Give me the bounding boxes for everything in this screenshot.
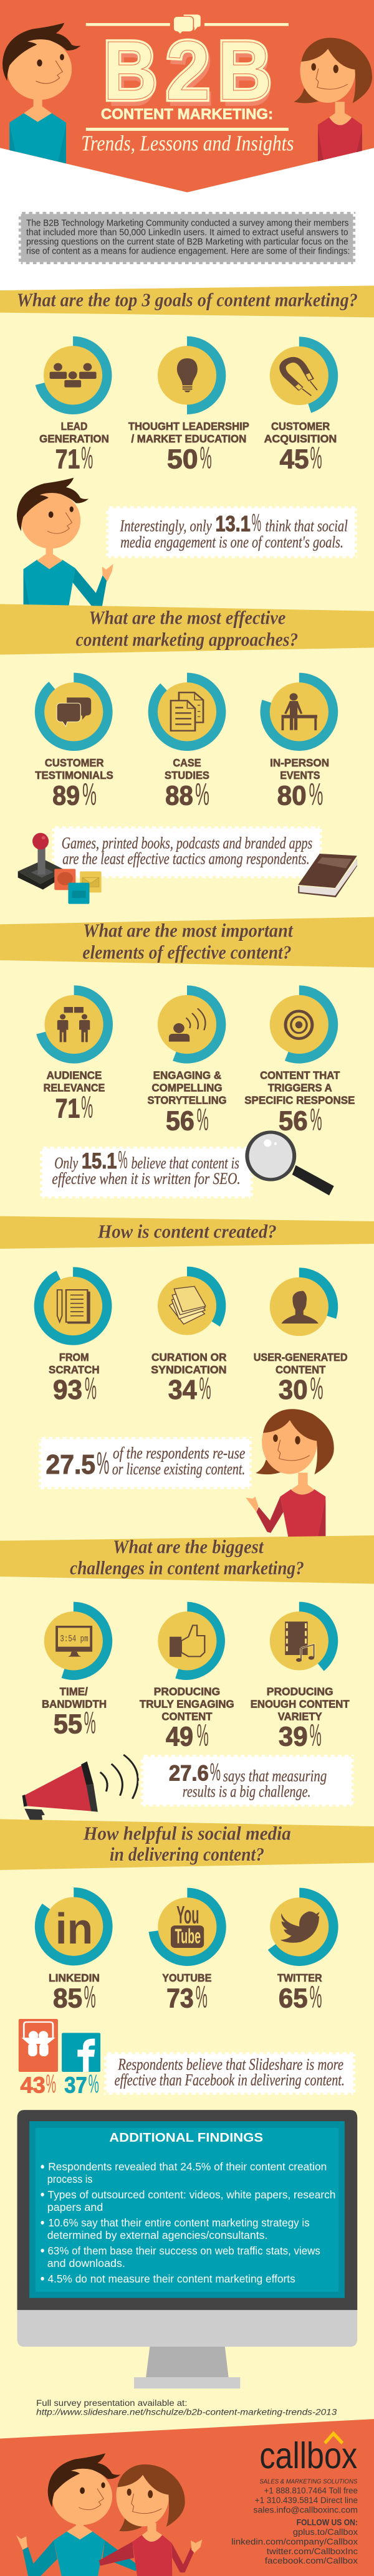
label: specific response: TRIGGERS A — [268, 1082, 332, 1094]
label: engaging storytelling — [147, 1069, 227, 1137]
panel: social media: % — [310, 1980, 322, 2015]
contact details: SALES & MARKETING SOLUTIONS — [259, 2478, 358, 2485]
donut: in-person events 80% — [260, 673, 338, 751]
label: customer acquisition: % — [310, 441, 322, 475]
contact details: twitter.com/CallboxInc — [267, 2546, 358, 2556]
section heading — [0, 1819, 374, 1870]
label: from scratch — [49, 1351, 100, 1406]
icon: youtube: Tube — [175, 1925, 201, 1948]
callout: social media engagement: Interestingly, only — [120, 517, 212, 535]
icon: linkedin: in — [55, 1904, 93, 1953]
section heading: in delivering content? — [110, 1844, 264, 1865]
icon: light bulb — [177, 358, 198, 392]
label: engaging content: TRULY ENGAGING — [140, 1698, 234, 1710]
label: customer testimonials — [35, 756, 113, 812]
label: lead generation: GENERATION — [39, 432, 109, 445]
callout: SEO: effective when it is written for SEO. — [52, 1170, 241, 1188]
section heading: challenges in content marketing? — [70, 1558, 304, 1579]
label: user generated: 30 — [279, 1374, 308, 1405]
contact details: +1 310.439.5814 Direct line — [255, 2495, 358, 2505]
panel: how is content created: % — [85, 1371, 97, 1406]
callout: SEO: believe that content is — [131, 1154, 239, 1172]
callout: re-use: or license existing content. — [112, 1460, 245, 1478]
label: thought leadership: THOUGHT LEADERSHIP — [128, 420, 249, 432]
label: engaging storytelling: STORYTELLING — [147, 1094, 227, 1106]
label: lead generation: 71 — [55, 444, 80, 474]
panel: social media: % — [84, 1980, 96, 2015]
label: audience relevance: AUDIENCE — [47, 1069, 102, 1081]
icon: megaphone — [22, 1755, 138, 1820]
donut: engaging content 49% — [158, 1602, 225, 1680]
panel: additional findings monitor — [0, 2110, 374, 2576]
stat: slideshare 43%: 43 — [21, 2073, 46, 2098]
label: content variety — [251, 1686, 350, 1753]
donut: from scratch 93% — [34, 1267, 112, 1345]
label: youtube: 73 — [166, 1983, 194, 2013]
label: specific response: 56 — [279, 1105, 308, 1136]
label: time bandwidth: TIME/ — [60, 1686, 88, 1697]
woman character pointing — [246, 1409, 334, 1539]
findings list: determined by external agencies/consultants. — [47, 2229, 267, 2241]
section heading — [0, 604, 374, 655]
label: from scratch: FROM — [59, 1351, 89, 1363]
section heading: elements of effective content? — [82, 942, 292, 963]
label: time bandwidth — [42, 1686, 107, 1740]
label: engaging content: % — [197, 1718, 209, 1753]
label: twitter — [277, 1972, 322, 2015]
icon: facebook — [62, 2033, 100, 2072]
label: lead generation — [39, 420, 109, 475]
panel: social media: % — [46, 2069, 56, 2099]
title: B2B: 2 — [166, 24, 210, 117]
label: in-person events: % — [309, 777, 323, 812]
man character pointing — [17, 478, 113, 611]
findings list: Types of outsourced content: videos, white papers, research — [48, 2188, 335, 2201]
survey source text: Full survey presentation available at: — [36, 2398, 187, 2408]
label: case studies: STUDIES — [165, 769, 209, 781]
findings list: and downloads. — [47, 2257, 125, 2269]
label: audience relevance: % — [81, 1090, 93, 1124]
panel: how is content created — [0, 1216, 374, 1539]
label: in-person events: 80 — [277, 780, 307, 811]
label: case studies — [165, 756, 209, 812]
label: from scratch: 93 — [53, 1374, 82, 1405]
woman character in footer — [99, 2464, 202, 2576]
icon: book — [298, 854, 357, 897]
icon: pencil and notebook — [57, 1290, 90, 1324]
title: B2B: 2 — [170, 27, 212, 122]
man character — [2, 23, 80, 163]
panel: header — [0, 0, 374, 264]
icon: two people talking — [57, 1007, 90, 1042]
callout: slideshare vs facebook — [104, 2052, 355, 2095]
icon: storyteller — [169, 1008, 205, 1042]
section heading — [0, 917, 374, 968]
label: in-person events — [270, 756, 329, 812]
label: engaging storytelling: ENGAGING & — [153, 1069, 221, 1081]
label: customer testimonials: 89 — [52, 780, 80, 811]
section heading — [0, 285, 374, 317]
callout: social media engagement: 13.1 — [216, 512, 251, 536]
panel: biggest challenges — [0, 1535, 374, 1820]
icon: user silhouette — [282, 1291, 319, 1324]
label: in-person events: EVENTS — [280, 769, 320, 781]
callout: least effective tactics — [52, 826, 322, 878]
survey source text: http://www.slideshare.net/hschulze/b2b-content-marketing-trends-2013 — [36, 2407, 337, 2417]
icon: target — [285, 1011, 312, 1039]
icon: slideshare — [19, 2019, 58, 2072]
donut: thought leadership 50% — [158, 336, 226, 414]
label: linkedin: LINKEDIN — [49, 1972, 100, 1984]
section heading: How is content created? — [97, 1222, 277, 1243]
donut: user generated 30% — [270, 1267, 338, 1336]
icon: monitor clock: 3:54 pm — [60, 1634, 89, 1644]
icon: magnet — [282, 360, 317, 396]
callout: measuring results: says that measuring — [223, 1767, 327, 1785]
contact details: sales.info@callboxinc.com — [253, 2505, 358, 2515]
section heading: How helpful is social media — [83, 1824, 291, 1844]
label: engaging content: PRODUCING — [154, 1686, 220, 1697]
callout: re-use: of the respondents re-use — [113, 1444, 246, 1462]
header banner — [0, 0, 374, 193]
label: youtube — [162, 1972, 211, 2015]
icon: thumbs up — [170, 1625, 204, 1657]
callout: SEO: Only — [54, 1154, 78, 1172]
section heading — [0, 1216, 374, 1249]
label: content variety: % — [310, 1718, 322, 1753]
label: customer testimonials: % — [82, 777, 97, 812]
label: linkedin — [49, 1972, 100, 2015]
donut: twitter 65% — [268, 1888, 338, 1966]
label: curation or syndication: % — [199, 1371, 211, 1406]
label: time bandwidth: BANDWIDTH — [42, 1698, 107, 1710]
donut: specific response 56% — [270, 985, 338, 1064]
label: engaging content — [140, 1686, 234, 1753]
label: curation or syndication — [151, 1351, 227, 1406]
icon: person at table — [282, 693, 317, 730]
callout: measuring results — [141, 1755, 353, 1806]
stat: slideshare 43% — [21, 2069, 56, 2099]
panel: effective approaches — [0, 604, 374, 904]
label: content variety: PRODUCING — [267, 1686, 333, 1697]
label: customer testimonials: CUSTOMER — [45, 756, 104, 769]
title: B2B: B — [218, 24, 272, 117]
callout: SEO: 15.1 — [82, 1148, 117, 1173]
icon: twitter bird — [280, 1911, 320, 1943]
label: specific response: CONTENT THAT — [260, 1069, 340, 1081]
label: lead generation: LEAD — [61, 420, 87, 432]
label: twitter: 65 — [279, 1983, 308, 2013]
section heading: What are the most important — [83, 920, 294, 942]
callout: social media engagement: % — [252, 509, 261, 537]
icon: people — [50, 363, 97, 388]
label: user generated: USER-GENERATED — [254, 1351, 348, 1363]
label: engaging content: CONTENT — [161, 1710, 213, 1722]
section heading: What are the biggest — [113, 1537, 264, 1558]
monitor illustration — [17, 2110, 357, 2388]
icon: stack of papers — [170, 1286, 206, 1324]
icon: speech bubbles and rules — [86, 14, 289, 131]
label: engaging storytelling: % — [197, 1102, 209, 1137]
label: time bandwidth: 55 — [54, 1709, 82, 1739]
donut: engaging storytelling 56% — [158, 985, 226, 1064]
callout: measuring results: 27.6 — [169, 1761, 209, 1785]
contact details: gplus.to/Callbox — [293, 2527, 358, 2537]
label: engaging storytelling: COMPELLING — [151, 1082, 223, 1094]
icon: app tiles — [54, 869, 102, 904]
label: thought leadership: / MARKET EDUCATION — [131, 432, 246, 445]
donut: time 55% — [44, 1602, 112, 1680]
callout: re-use: % — [97, 1446, 109, 1481]
donut: lead generation 71% — [36, 336, 112, 414]
label: twitter: TWITTER — [277, 1972, 322, 1984]
label: case studies: CASE — [173, 756, 201, 769]
panel: social media — [0, 1819, 374, 2099]
title: B2B: B — [103, 24, 158, 117]
title: B2B: B — [108, 27, 155, 122]
title: B2B — [103, 24, 272, 122]
donut: audience relevance 71% — [36, 985, 113, 1064]
panel: effective approaches: % — [195, 777, 209, 812]
logo: callbox: callbox — [259, 2435, 357, 2476]
man character in footer — [16, 2453, 137, 2576]
label: from scratch: SCRATCH — [49, 1363, 100, 1376]
subtitle: trends: Trends, Lessons and Insights — [81, 132, 294, 156]
findings list: 4.5% do not measure their content marketing efforts — [48, 2273, 295, 2285]
label: customer acquisition: CUSTOMER — [271, 420, 330, 432]
label: content variety: VARIETY — [278, 1710, 322, 1722]
title: B2B: B — [223, 27, 271, 122]
label: audience relevance: RELEVANCE — [44, 1082, 105, 1094]
label: thought leadership: % — [200, 441, 212, 475]
contact details: +1 888.810.7464 Toll free — [264, 2486, 358, 2496]
callout: measuring results: results is a big challenge. — [183, 1782, 311, 1801]
label: thought leadership: 50 — [167, 444, 198, 474]
callout: SEO — [40, 1147, 253, 1198]
label: curation or syndication: CURATION OR — [151, 1351, 227, 1363]
label: in-person events: IN-PERSON — [270, 756, 329, 769]
label: youtube: % — [196, 1980, 208, 2015]
label: engaging content: 49 — [166, 1721, 193, 1752]
label: customer acquisition: ACQUISITION — [264, 432, 337, 445]
label: linkedin: 85 — [53, 1983, 82, 2013]
callout: measuring results: % — [210, 1758, 221, 1787]
label: thought leadership — [128, 420, 249, 475]
panel: social media: % — [89, 2069, 99, 2099]
findings list: process is — [47, 2173, 92, 2185]
donut: case studies 88% — [148, 673, 226, 751]
section heading: What are the most effective — [89, 608, 285, 629]
label: case studies: 88 — [165, 780, 193, 811]
label: content variety: ENOUGH CONTENT — [251, 1698, 350, 1710]
title: B2B: B — [218, 24, 272, 117]
label: time bandwidth: % — [84, 1705, 96, 1740]
callout: re-use — [39, 1437, 252, 1489]
label: customer acquisition: 45 — [279, 444, 309, 474]
contact details — [231, 2478, 358, 2565]
footer background — [0, 2419, 374, 2576]
title: B2B: B — [103, 24, 158, 117]
label: user generated — [254, 1351, 348, 1406]
icon: speech bubbles — [57, 697, 91, 727]
findings list: 10.6% say that their entire content marketing strategy is — [48, 2216, 310, 2229]
label: specific response: % — [310, 1102, 322, 1137]
label: curation or syndication: 34 — [168, 1374, 197, 1405]
findings list: Respondents revealed that 24.5% of their content creation — [48, 2160, 327, 2173]
section heading — [0, 1535, 374, 1584]
findings list: papers and — [47, 2201, 103, 2213]
callout: re-use: 27.5 — [46, 1449, 95, 1479]
title: B2B: 2 — [166, 24, 210, 117]
donut: customer acquisition 45% — [270, 336, 338, 413]
label: audience relevance — [44, 1069, 105, 1124]
label: engaging storytelling: 56 — [166, 1105, 194, 1136]
survey source text — [36, 2398, 337, 2417]
findings list: 63% of them base their success on web traffic stats, views — [48, 2244, 320, 2257]
contact details: linkedin.com/company/Callbox — [231, 2537, 358, 2546]
label: content variety: 39 — [279, 1721, 308, 1752]
callout: social media engagement — [106, 506, 357, 558]
section heading: content marketing approaches? — [76, 630, 298, 651]
label: customer testimonials: TESTIMONIALS — [35, 769, 113, 781]
icon: youtube: You — [176, 1901, 199, 1929]
label: youtube: YOUTUBE — [162, 1972, 211, 1984]
label: user generated: % — [310, 1371, 323, 1406]
label: lead generation: % — [81, 441, 93, 475]
findings list — [41, 2160, 335, 2285]
label: specific response: SPECIFIC RESPONSE — [244, 1094, 355, 1106]
panel: top 3 goals — [0, 285, 374, 611]
donut: curation 34% — [158, 1267, 226, 1335]
icon: joystick — [18, 833, 65, 890]
donut: linkedin 85% — [35, 1887, 113, 1965]
label: specific response — [244, 1069, 355, 1137]
donut: content variety 39% — [270, 1602, 338, 1671]
icon: magnifying glass — [245, 1130, 334, 1195]
stat: facebook 37%: 37 — [64, 2073, 87, 2098]
icon: film and music — [285, 1621, 314, 1662]
donut: customer testimonials 89% — [35, 673, 113, 751]
donut: youtube 73% — [149, 1888, 226, 1966]
icon: documents — [171, 692, 203, 731]
label: curation or syndication: SYNDICATION — [151, 1363, 227, 1376]
heading: additional findings: ADDITIONAL FINDINGS — [109, 2131, 263, 2145]
intro text box — [19, 212, 355, 264]
contact details: facebook.com/Callbox — [265, 2556, 358, 2565]
label: audience relevance: 71 — [55, 1092, 80, 1123]
panel: important elements — [0, 917, 374, 1198]
label: user generated: CONTENT — [276, 1363, 326, 1376]
contact details: FOLLOW US ON: — [297, 2517, 358, 2527]
label: customer acquisition — [264, 420, 337, 475]
subtitle: content marketing: CONTENT MARKETING: — [101, 107, 273, 123]
callout: SEO: % — [118, 1147, 128, 1174]
woman character — [294, 38, 372, 161]
icon: youtube — [171, 1901, 204, 1948]
